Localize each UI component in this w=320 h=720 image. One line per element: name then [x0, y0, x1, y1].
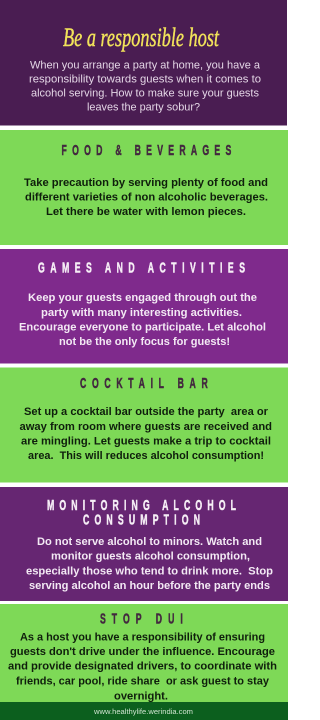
heading: monitoring alcohol consumption: CONSUMPTION — [83, 511, 200, 528]
footer band — [0, 702, 288, 720]
body: games and activities — [19, 292, 266, 348]
body: stop DUI: overnight. — [114, 690, 168, 702]
intro text: leaves the party sobur? — [87, 102, 200, 114]
panel: monitoring alcohol consumption — [0, 487, 288, 601]
heading: food and beverages: FOOD & BEVERAGES — [62, 142, 231, 159]
body: games and activities: Encourage everyone to participate. Let alcohol — [19, 322, 266, 334]
heading: monitoring alcohol consumption — [47, 497, 236, 528]
intro text — [29, 60, 261, 114]
footer url: www.healthylife.werindia.com — [93, 707, 193, 716]
panel: stop DUI — [0, 604, 288, 702]
body: games and activities: not be the only focus for guests! — [59, 336, 230, 348]
heading: games and activities: GAMES AND ACTIVITIES — [38, 259, 245, 276]
intro text: responsibility towards guests when it comes to — [29, 74, 261, 86]
heading: monitoring alcohol consumption: MONITORING ALCOHOL — [47, 497, 236, 514]
title: Be a responsible host — [63, 23, 220, 52]
body: monitoring alcohol consumption — [26, 536, 273, 592]
body: stop DUI: friends, car pool, ride share or ask guest to stay — [16, 675, 270, 687]
body: stop DUI — [8, 631, 277, 702]
body: food and beverages — [24, 177, 268, 218]
body: monitoring alcohol consumption: monitor guests alcohol consumption, — [51, 551, 250, 563]
panel: games and activities — [0, 249, 288, 364]
body: games and activities: Keep your guests engaged through out the — [28, 292, 257, 304]
body: monitoring alcohol consumption: especially those who tend to drink more. Stop — [26, 565, 273, 577]
body: monitoring alcohol consumption: serving alcohol an hour before the party ends — [29, 580, 270, 592]
body: cocktail bar: Set up a cocktail bar outside the party area or — [24, 406, 269, 418]
panel: introduction — [0, 0, 287, 126]
body: stop DUI: and provide designated drivers, to coordinate with — [8, 661, 277, 673]
body: cocktail bar: area. This will reduces alcohol consumption! — [28, 450, 264, 462]
body: cocktail bar — [20, 406, 272, 462]
body: food and beverages: Take precaution by serving plenty of food and — [24, 177, 268, 189]
heading: stop DUI: STOP DUI — [100, 610, 183, 627]
body: stop DUI: guests don't drive under the influence. Encourage — [10, 646, 275, 658]
body: games and activities: party with many interesting activities. — [41, 307, 242, 319]
heading: cocktail bar: COCKTAIL BAR — [80, 375, 208, 392]
body: food and beverages: different varieties of non alcoholic beverages. — [25, 192, 268, 204]
panel: food and beverages — [0, 130, 288, 245]
body: cocktail bar: away from room where guests are received and — [20, 421, 272, 433]
intro text: alcohol serving. How to make sure your guests — [31, 88, 259, 100]
body: food and beverages: Let there be water with lemon pieces. — [46, 206, 246, 218]
intro text: When you arrange a party at home, you have a — [30, 60, 261, 72]
body: cocktail bar: are mingling. Let guests make a trip to cocktail — [21, 436, 271, 448]
body: stop DUI: As a host you have a responsibility of ensuring — [20, 631, 265, 643]
body: monitoring alcohol consumption: Do not serve alcohol to minors. Watch and — [37, 536, 262, 548]
panel: cocktail bar — [0, 368, 288, 482]
